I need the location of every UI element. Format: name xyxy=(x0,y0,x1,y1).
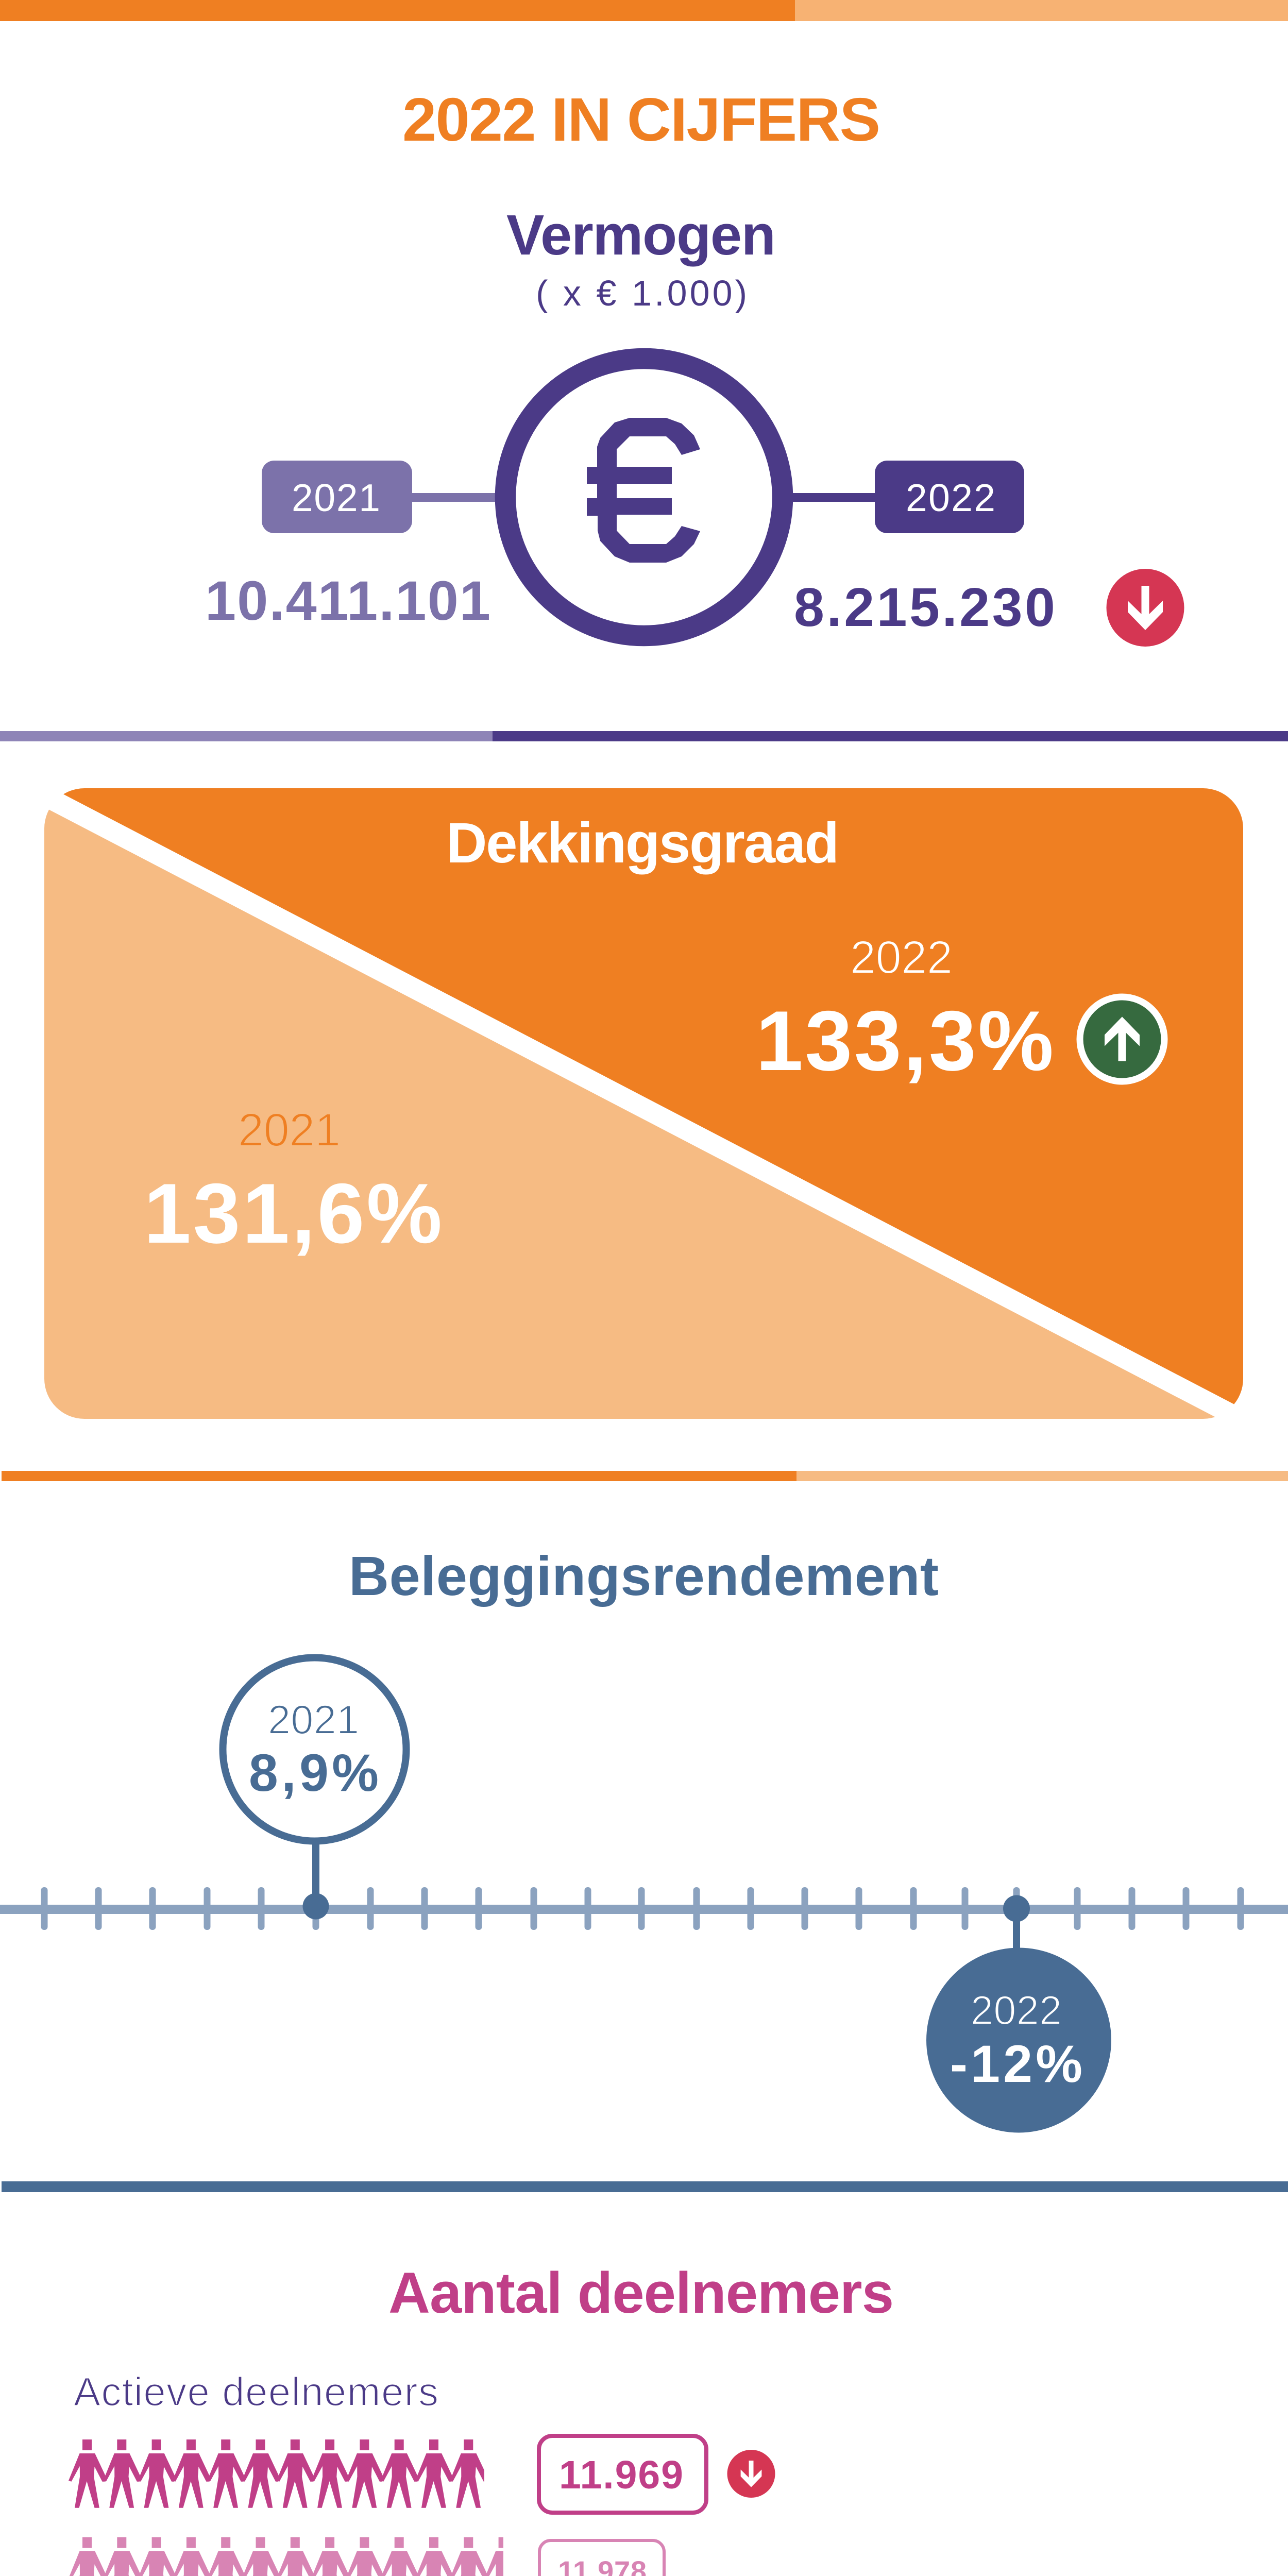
value box 2022: 11.969 xyxy=(559,2453,683,2497)
value box 2022 xyxy=(539,2436,706,2513)
value 2022: 8.215.230 xyxy=(794,577,1055,638)
label 2022: 2022 xyxy=(850,932,953,984)
label 2022: 2022 xyxy=(906,476,995,519)
icon: down arrow xyxy=(1107,569,1184,647)
label 2022: 2022 xyxy=(971,1987,1062,2033)
panel: vermogen xyxy=(205,204,1184,647)
unit note: ( x € 1.000) xyxy=(536,273,747,313)
timeline axis xyxy=(0,1887,1288,1930)
section bar blue xyxy=(2,2181,1288,2192)
icon: down arrow xyxy=(727,2450,775,2498)
panel: actieve deelnemers xyxy=(69,2369,775,2576)
title: 2022 IN CIJFERS xyxy=(402,86,880,154)
value 2022: -12% xyxy=(950,2035,1082,2093)
heading: beleggingsrendement: Beleggingsrendement xyxy=(349,1545,939,1607)
section bar orange xyxy=(2,1471,1288,1481)
split shape xyxy=(44,784,1243,1428)
value 2021: 10.411.101 xyxy=(205,569,490,632)
connector 2022 xyxy=(791,493,876,502)
connector 2021 xyxy=(412,493,497,502)
label 2021 xyxy=(262,461,412,533)
people row 2021 xyxy=(69,2537,522,2576)
people row 2022 xyxy=(69,2439,487,2508)
top colour bar xyxy=(0,0,1288,21)
heading: vermogen: Vermogen xyxy=(506,204,776,267)
value 2021: 131,6% xyxy=(144,1166,442,1261)
heading: aantal deelnemers: Aantal deelnemers xyxy=(388,2261,894,2325)
panel: dekkingsgraad xyxy=(44,784,1243,1428)
icon: euro coin xyxy=(505,359,783,636)
label 2021: 2021 xyxy=(238,1105,341,1156)
marker 2021 xyxy=(223,1658,406,1920)
value 2022: 133,3% xyxy=(756,993,1054,1088)
label 2021: 2021 xyxy=(292,476,380,519)
label 2022 xyxy=(875,461,1024,533)
section bar purple xyxy=(0,731,1288,741)
heading: dekkingsgraad: Dekkingsgraad xyxy=(446,811,839,875)
marker 2022 xyxy=(926,1895,1111,2133)
label 2021: 2021 xyxy=(268,1697,359,1742)
value box 2021 xyxy=(539,2540,664,2576)
label: Actieve deelnemers xyxy=(74,2369,438,2414)
value 2021: 8,9% xyxy=(249,1743,379,1802)
icon: up arrow xyxy=(1080,997,1164,1081)
panel: beleggingsrendement xyxy=(0,1545,1288,2133)
